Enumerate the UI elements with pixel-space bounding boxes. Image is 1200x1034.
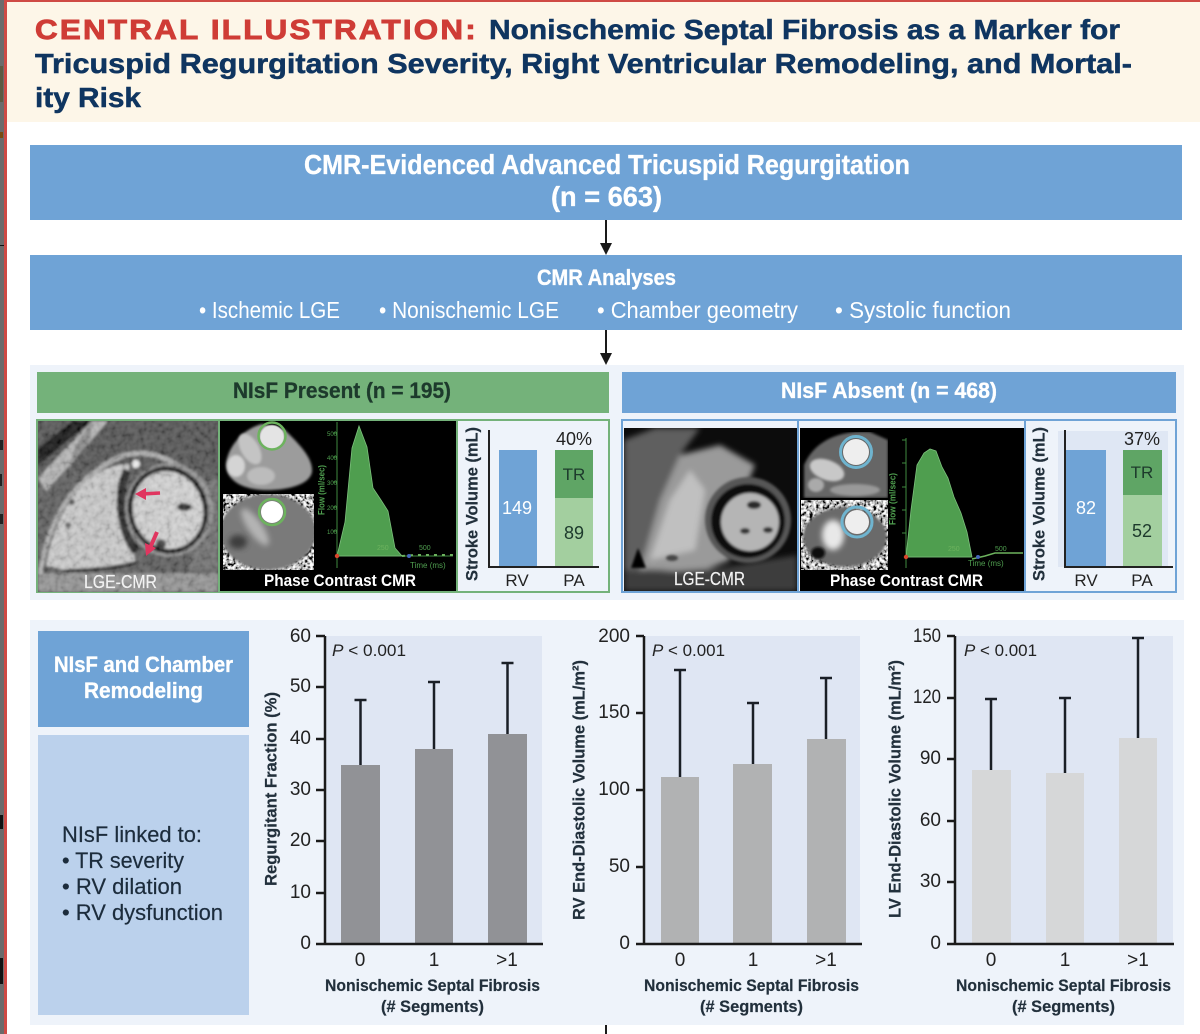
chart: regurgitant fraction <box>261 626 543 1016</box>
image: anatomical slice <box>226 422 312 490</box>
chart: LV end-diastolic volume: 1 <box>1060 950 1070 971</box>
panel: CMR analyses <box>30 255 1182 330</box>
chart: flow curve: 400 <box>327 456 338 462</box>
chart: LV end-diastolic volume: 150 <box>913 626 941 647</box>
chart: RV end-diastolic volume: RV End-Diastolic Volume (mL/m²) <box>569 660 588 920</box>
panel: CMR analyses: • Ischemic LGE <box>199 297 340 323</box>
bar: PA stacked <box>555 429 593 567</box>
bar: PA stacked: 52 <box>1132 521 1152 541</box>
chart: LV end-diastolic volume: 120 <box>913 687 941 708</box>
chart: regurgitant fraction: 1 <box>429 950 439 971</box>
text block: NIsF linked to: • RV dilation <box>62 874 182 899</box>
panel: CMR analyses: CMR Analyses <box>537 265 676 290</box>
chart: RV end-diastolic volume <box>569 626 862 1016</box>
chart: LV end-diastolic volume: Nonischemic Septal Fibrosis <box>956 976 1171 995</box>
chart: RV end-diastolic volume: 150 <box>598 702 630 723</box>
chart: flow curve: 500 <box>419 545 431 552</box>
image: phase contrast CMR with flow curve <box>800 428 1025 591</box>
chart: stroke volume NIsF present: RV <box>505 571 529 590</box>
chart: RV end-diastolic volume: 1 <box>748 950 758 971</box>
chart: LV end-diastolic volume: 30 <box>920 871 941 892</box>
chart: LV end-diastolic volume: 0 <box>930 933 941 954</box>
label: phase contrast CMR: Phase Contrast CMR <box>264 571 416 590</box>
chart: regurgitant fraction: 0 <box>300 933 311 954</box>
chart: stroke volume NIsF present <box>462 427 599 590</box>
chart: flow curve: Flow (ml/sec) <box>316 465 326 515</box>
bar: PA stacked: 40% <box>556 429 592 449</box>
chart: flow curve: 250 <box>948 546 960 553</box>
image: anatomical slice <box>804 432 888 498</box>
label: phase contrast CMR: Phase Contrast CMR <box>830 571 983 590</box>
chart: regurgitant fraction: 10 <box>290 882 311 903</box>
arrow: continuing below <box>605 1025 607 1034</box>
bar: PA stacked <box>1123 429 1162 567</box>
chart: RV end-diastolic volume: (# Segments) <box>700 997 803 1016</box>
label: LGE-CMR: LGE-CMR <box>674 569 745 589</box>
heading: NIsF and chamber remodeling: Remodeling <box>84 678 203 703</box>
image: LGE-CMR without septal fibrosis <box>624 428 797 591</box>
chart: regurgitant fraction: 30 <box>290 779 311 800</box>
bar: RV 82 <box>1066 450 1106 567</box>
panel: NIsF present <box>37 372 609 592</box>
chart: stroke volume NIsF absent: Stroke Volume (mL) <box>1029 427 1048 581</box>
chart: regurgitant fraction: Regurgitant Fraction (%) <box>261 692 280 886</box>
panel: study population: (n = 663) <box>551 181 662 212</box>
chart: regurgitant fraction: 60 <box>290 626 311 647</box>
image: phase slice <box>801 500 888 570</box>
chart: stroke volume NIsF absent: PA <box>1131 571 1153 590</box>
chart: regurgitant fraction: (# Segments) <box>381 997 484 1016</box>
chart: regurgitant fraction: >1 <box>496 950 518 971</box>
title: heading line 1: Nonischemic Septal Fibrosis as a Marker for <box>489 14 1120 45</box>
bar: PA stacked: 37% <box>1124 429 1160 449</box>
panel: study population: CMR-Evidenced Advanced Tricuspid Regurgitation <box>304 149 910 180</box>
chart: LV end-diastolic volume: >1 <box>1127 950 1149 971</box>
arrow: analyses to groups <box>600 330 612 365</box>
panel: CMR analyses: • Nonischemic LGE <box>379 297 559 323</box>
chart: LV end-diastolic volume: LV End-Diastolic Volume (mL/m²) <box>885 660 904 918</box>
heading: NIsF and chamber remodeling <box>38 631 249 727</box>
chart: flow curve: Time (ms) <box>968 559 1004 568</box>
image: LGE-CMR with septal fibrosis <box>38 421 218 592</box>
chart: RV end-diastolic volume: 0 <box>675 950 685 971</box>
bar: PA stacked: TR <box>1131 463 1153 482</box>
chart: RV end-diastolic volume: 0 <box>619 933 630 954</box>
chart: regurgitant fraction: P < 0.001 <box>332 641 406 660</box>
panel: CMR analyses: • Chamber geometry <box>597 297 798 323</box>
chart: stroke volume NIsF present: Stroke Volume (mL) <box>462 427 481 581</box>
chart: flow curve <box>887 438 1023 568</box>
chart: regurgitant fraction: 20 <box>290 830 311 851</box>
panel: NIsF groups <box>30 365 1184 600</box>
chart: regurgitant fraction: Nonischemic Septal Fibrosis <box>325 976 540 995</box>
title: heading line 2: Tricuspid Regurgitation Severity, Right Ventricular Remodeling, and Mortal- <box>35 48 1132 79</box>
icon: fibrosis arrow upper <box>135 488 160 500</box>
panel: CMR analyses: • Systolic function <box>835 297 1011 323</box>
text block: NIsF linked to: • TR severity <box>62 848 184 873</box>
chart: flow curve: 100 <box>327 530 338 536</box>
title banner <box>7 2 1200 122</box>
chart: stroke volume NIsF present: PA <box>563 571 585 590</box>
chart: LV end-diastolic volume <box>885 626 1174 1016</box>
title: central illustration label: CENTRAL ILLUSTRATION: <box>35 14 478 45</box>
label: LGE-CMR: LGE-CMR <box>84 572 157 592</box>
chart: stroke volume NIsF absent <box>1029 427 1173 590</box>
chart: regurgitant fraction: 50 <box>290 676 311 697</box>
title: heading line 3: ity Risk <box>35 82 141 113</box>
chart: regurgitant fraction: 40 <box>290 728 311 749</box>
chart: flow curve: 300 <box>327 481 338 487</box>
text block: NIsF linked to <box>38 735 249 1015</box>
heading: NIsF present <box>37 372 609 413</box>
chart: RV end-diastolic volume: Nonischemic Septal Fibrosis <box>644 976 859 995</box>
bar: RV 82: 82 <box>1076 498 1096 518</box>
chart: LV end-diastolic volume: (# Segments) <box>1012 997 1115 1016</box>
chart: flow curve: 250 <box>377 545 389 552</box>
image: phase contrast CMR with flow curve <box>220 421 457 591</box>
icon: fibrosis arrow lower <box>145 532 157 556</box>
panel: NIsF absent <box>622 372 1176 592</box>
heading: NIsF absent: NIsF Absent (n = 468) <box>781 378 997 403</box>
chart: regurgitant fraction: 0 <box>355 950 365 971</box>
chart: LV end-diastolic volume: 90 <box>920 748 941 769</box>
text block: NIsF linked to: • RV dysfunction <box>62 900 223 925</box>
chart: flow curve: Time (ms) <box>410 561 446 570</box>
chart: flow curve: 500 <box>327 432 338 438</box>
chart: stroke volume NIsF absent: RV <box>1074 571 1098 590</box>
chart: RV end-diastolic volume: P < 0.001 <box>652 641 725 660</box>
chart: LV end-diastolic volume: 0 <box>986 950 996 971</box>
bar: PA stacked: TR <box>563 465 585 484</box>
chart: flow curve: 500 <box>995 546 1007 553</box>
bar: PA stacked: 89 <box>564 523 584 543</box>
arrow: population to analyses <box>600 220 612 255</box>
panel: NIsF and chamber remodeling <box>30 620 1184 1025</box>
chart: flow curve <box>316 422 453 570</box>
chart: flow curve: Flow (ml/sec) <box>887 473 897 525</box>
chart: RV end-diastolic volume: 100 <box>598 779 630 800</box>
panel: study population <box>30 145 1182 220</box>
chart: LV end-diastolic volume: P < 0.001 <box>964 641 1037 660</box>
chart: LV end-diastolic volume: 60 <box>920 810 941 831</box>
bar: RV 149: 149 <box>502 498 532 518</box>
bar: RV 149 <box>499 450 537 567</box>
image: phase slice <box>220 494 316 570</box>
heading: NIsF absent <box>622 372 1176 413</box>
chart: RV end-diastolic volume: 200 <box>598 626 630 647</box>
chart: RV end-diastolic volume: 50 <box>609 856 630 877</box>
text block: NIsF linked to: NIsF linked to: <box>62 822 202 847</box>
heading: NIsF and chamber remodeling: NIsF and Chamber <box>54 652 233 677</box>
chart: flow curve: 200 <box>327 506 338 512</box>
heading: NIsF present: NIsF Present (n = 195) <box>233 378 451 403</box>
chart: RV end-diastolic volume: >1 <box>815 950 837 971</box>
